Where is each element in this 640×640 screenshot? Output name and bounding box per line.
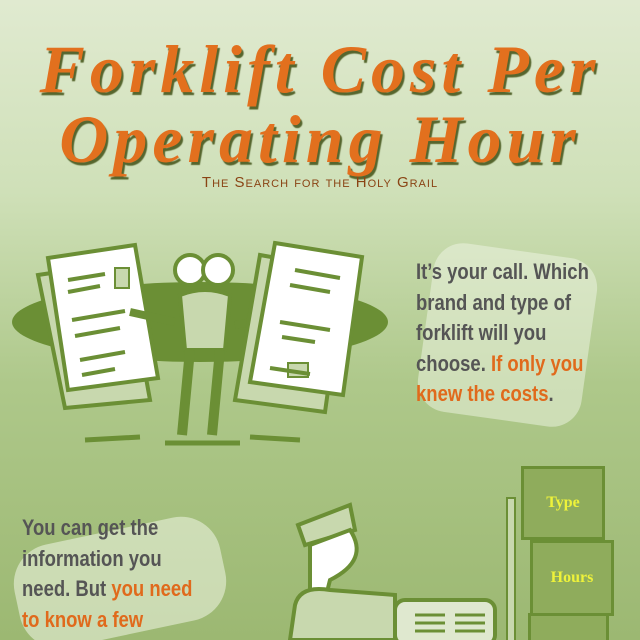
text block right bbox=[416, 259, 589, 406]
forklift mast bbox=[506, 497, 516, 640]
title line 2: Operating Hour bbox=[59, 101, 581, 177]
text block left: need. But you need bbox=[22, 576, 192, 601]
title line 1: Forklift Cost Per bbox=[39, 31, 601, 107]
person bbox=[130, 255, 280, 435]
box: Type bbox=[521, 466, 605, 540]
left document bbox=[38, 245, 158, 408]
text block right: forklift will you bbox=[416, 320, 546, 345]
subtitle: The Search for the Holy Grail bbox=[202, 174, 438, 191]
text block left bbox=[22, 515, 192, 632]
green ellipse backdrop bbox=[12, 282, 388, 362]
illustration: forklift driver bbox=[288, 502, 497, 640]
text block right: knew the costs. bbox=[416, 381, 554, 406]
text block right: choose. If only you bbox=[416, 350, 583, 376]
callout backdrop right bbox=[414, 239, 601, 431]
text block right: brand and type of bbox=[416, 290, 571, 314]
box: Hours: Hours bbox=[551, 569, 593, 586]
right document bbox=[235, 243, 362, 412]
text block left: information you bbox=[22, 546, 162, 570]
callout backdrop left bbox=[6, 509, 234, 640]
box: Hours bbox=[530, 540, 614, 616]
box: Type: Type bbox=[546, 494, 580, 511]
box: third bbox=[528, 613, 609, 640]
text block left: You can get the bbox=[22, 515, 158, 540]
illustration: person comparing documents bbox=[12, 240, 388, 446]
text block right: It’s your call. Which bbox=[416, 259, 589, 284]
text block left: to know a few bbox=[22, 606, 143, 632]
